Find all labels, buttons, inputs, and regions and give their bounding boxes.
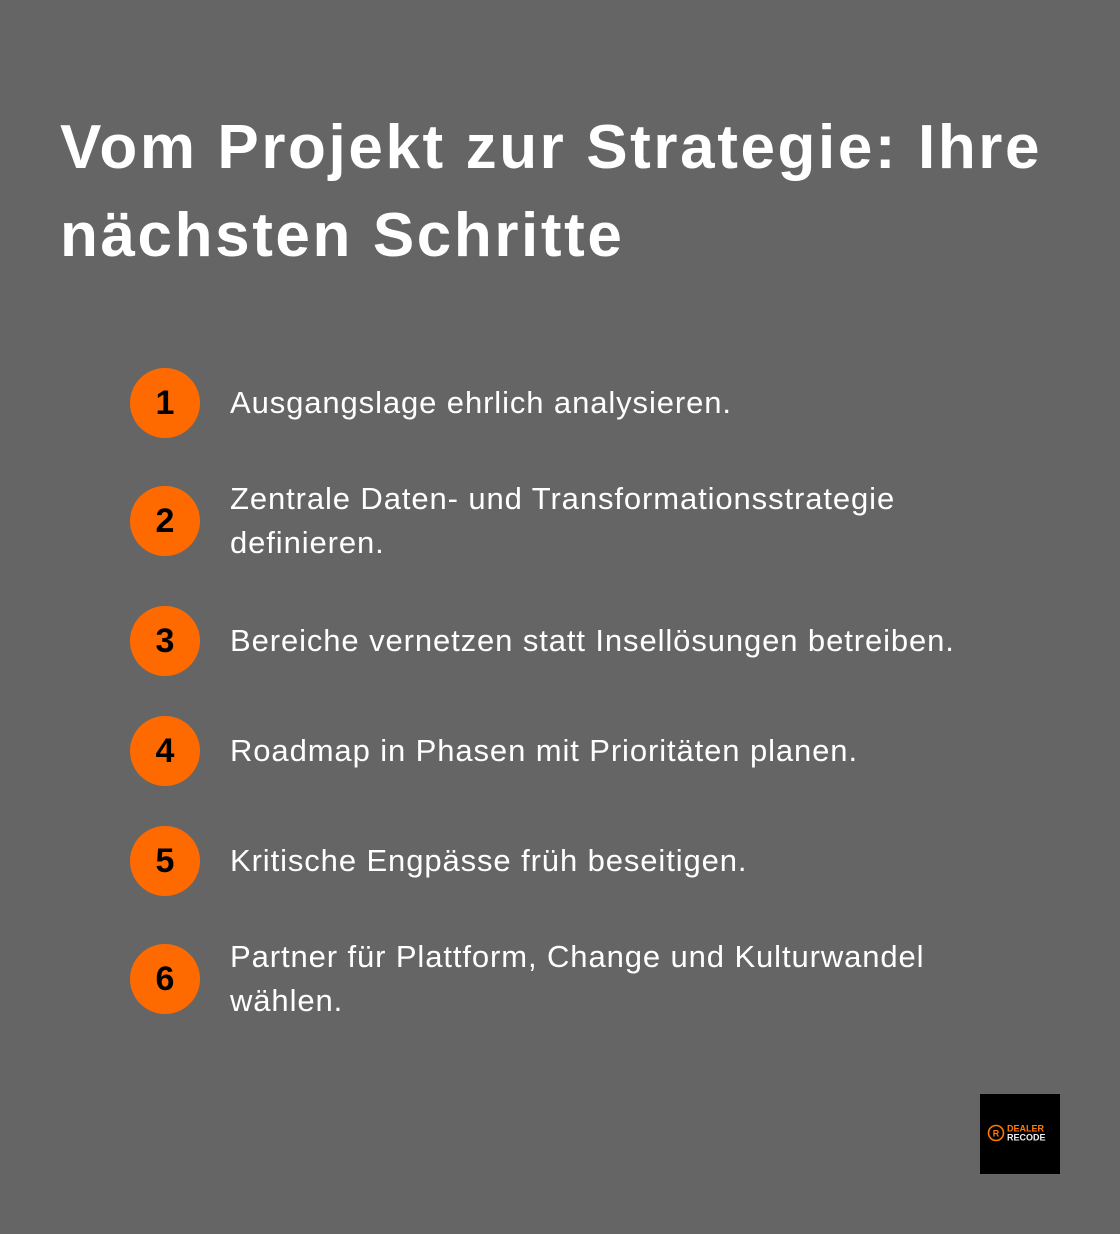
step 3 — [130, 606, 955, 676]
title: Vom Projekt zur Strategie: Ihre — [60, 113, 1042, 182]
step 1 — [130, 368, 732, 438]
step 6: 6 — [156, 960, 174, 998]
logo — [980, 1094, 1060, 1174]
step 6 — [130, 939, 924, 1018]
step 4 — [130, 716, 858, 786]
step 2 — [130, 481, 895, 560]
title: nächsten Schritte — [60, 201, 624, 270]
step 3: Bereiche vernetzen statt Insellösungen betreiben. — [230, 623, 955, 658]
step 5: Kritische Engpässe früh beseitigen. — [230, 843, 747, 878]
step 5 — [130, 826, 747, 896]
logo: DEALER — [1007, 1124, 1045, 1134]
logo: R — [993, 1128, 1000, 1138]
logo: RECODE — [1007, 1132, 1046, 1142]
step 5: 5 — [156, 842, 174, 880]
step 2: 2 — [156, 502, 174, 540]
step 2: Zentrale Daten- und Transformationsstrategie — [230, 481, 895, 516]
step 2: definieren. — [230, 525, 385, 560]
step 1: Ausgangslage ehrlich analysieren. — [230, 385, 732, 420]
title — [60, 113, 1042, 270]
step 6: wählen. — [230, 983, 343, 1018]
step 4: Roadmap in Phasen mit Prioritäten planen. — [230, 733, 858, 768]
step 1: 1 — [156, 384, 174, 422]
step 4: 4 — [156, 732, 174, 770]
step 3: 3 — [156, 622, 174, 660]
step 6: Partner für Plattform, Change und Kulturwandel — [230, 939, 924, 974]
